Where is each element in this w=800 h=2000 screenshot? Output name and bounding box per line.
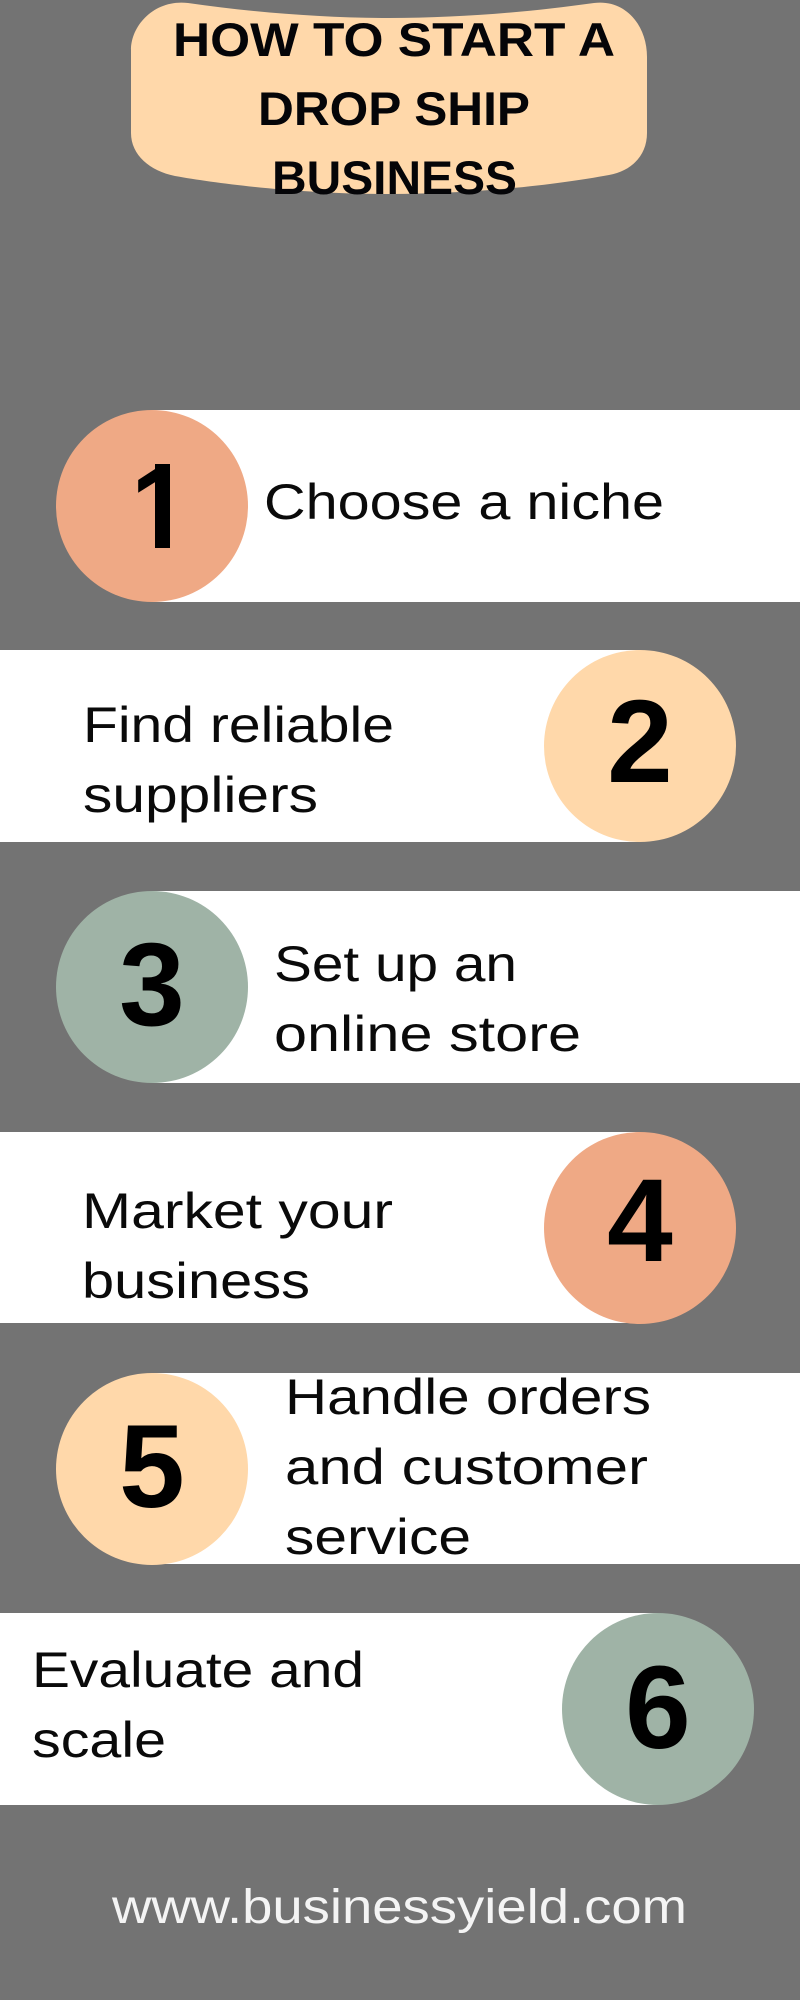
step 3: online store [274,1006,581,1062]
step 2: suppliers [83,767,318,823]
step 4 [0,1132,736,1324]
step 1 [56,410,800,602]
step 6: scale [32,1712,166,1768]
step 6: 6 [625,1642,691,1774]
step 5: 5 [119,1401,185,1533]
step 6: Evaluate and [32,1642,364,1698]
step 4: Market your [82,1183,393,1239]
step 5: and customer [285,1439,648,1495]
title text: BUSINESS [272,151,517,204]
title text: HOW TO START A [173,13,615,66]
title text: DROP SHIP [258,82,530,135]
step 1: 1 [130,442,196,574]
title text [173,13,615,204]
step 6 [0,1613,754,1805]
step 5: Handle orders [285,1369,651,1425]
step 5 [56,1369,800,1565]
step 2: 2 [607,676,673,808]
step 4: 4 [607,1155,673,1287]
step 2 [0,650,736,842]
step 4: business [82,1253,310,1309]
step 5: service [285,1509,471,1565]
step 1: Choose a niche [264,474,664,530]
website url: www.businessyield.com [111,1881,687,1934]
step 3: 3 [119,919,185,1051]
step 3: Set up an [274,936,517,992]
step 3 [56,891,800,1083]
title banner [131,3,647,204]
step 2: Find reliable [83,697,394,753]
